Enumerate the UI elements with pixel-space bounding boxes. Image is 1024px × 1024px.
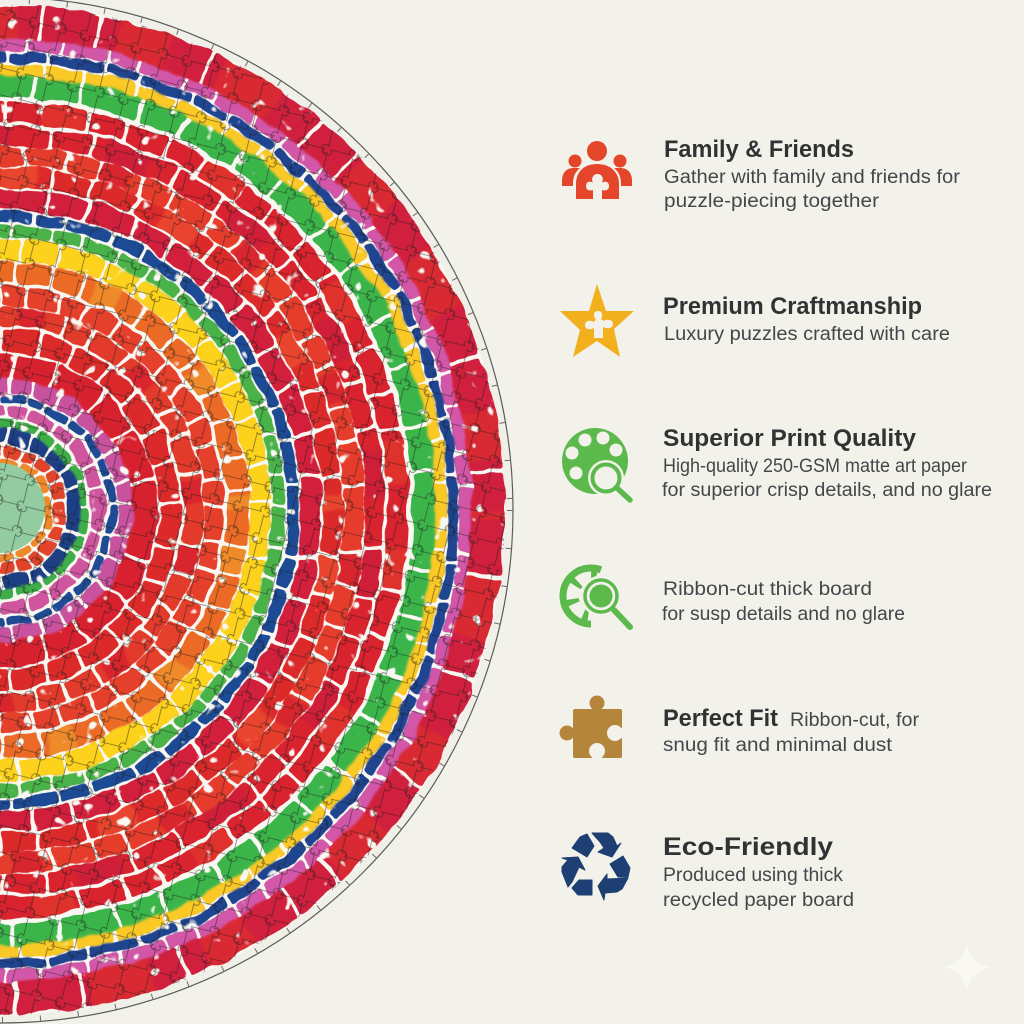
description: Gather with family and friends for (664, 167, 961, 188)
description (664, 167, 961, 212)
description: for susp details and no glare (662, 604, 905, 625)
icon: star with puzzle piece (560, 284, 634, 357)
description: puzzle-piecing together (664, 191, 880, 212)
heading: Eco-Friendly (663, 833, 833, 861)
icon: puzzle piece (560, 696, 624, 760)
icon: sparkle watermark (943, 944, 991, 991)
feature: Eco-Friendly (562, 833, 854, 911)
heading and description: Perfect Fit (663, 705, 778, 732)
circular jigsaw puzzle artwork (0, 0, 513, 1023)
heading and description: snug fit and minimal dust (663, 735, 893, 756)
description: High-quality 250-GSM matte art paper (663, 456, 968, 477)
description: for superior crisp details, and no glare (662, 480, 992, 501)
heading: Family & Friends (664, 136, 854, 163)
description: Produced using thick (663, 865, 844, 886)
description (662, 456, 992, 501)
feature: Family & Friends (562, 136, 961, 212)
heading and description (663, 705, 920, 756)
description (662, 579, 905, 625)
feature: Ribbon-cut thick board (563, 568, 905, 627)
feature: Perfect Fit (560, 696, 920, 760)
heading: Premium Craftmanship (663, 293, 922, 320)
icon: palette with magnifier (562, 428, 630, 500)
icon: segmented dial with magnifier (563, 568, 630, 627)
icon: recycling arrows (562, 833, 630, 900)
icon: people with puzzle piece (562, 141, 632, 199)
heading and description: Ribbon-cut, for (790, 710, 920, 731)
description: recycled paper board (663, 890, 854, 911)
feature: Premium Craftmanship (560, 284, 950, 357)
description (663, 865, 854, 911)
feature: Superior Print Quality (562, 425, 992, 501)
heading: Superior Print Quality (663, 425, 917, 452)
description: Ribbon-cut thick board (663, 579, 872, 600)
description: Luxury puzzles crafted with care (664, 324, 950, 345)
